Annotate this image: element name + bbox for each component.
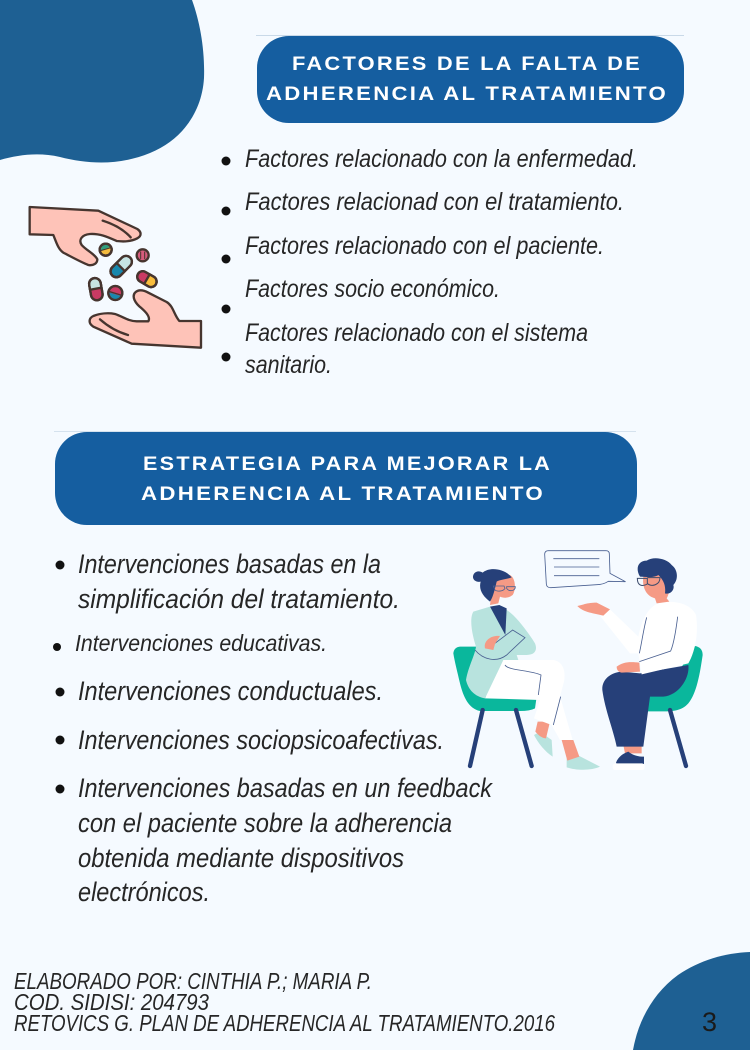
list: factores: Factores relacionado con el sistema bbox=[245, 319, 588, 347]
icon: pill round blue-red bbox=[108, 286, 122, 300]
page number: 3 bbox=[702, 1007, 717, 1037]
list: estrategia: con el paciente sobre la adherencia bbox=[78, 808, 452, 838]
list: factores: Factores socio económico. bbox=[245, 275, 500, 303]
list: estrategia: electrónicos. bbox=[78, 877, 210, 907]
footer: credits: ELABORADO POR: CINTHIA P.; MARIA P. bbox=[14, 968, 372, 994]
list: estrategia: Intervenciones sociopsicoafectivas. bbox=[78, 725, 444, 755]
footer: credits: COD. SIDISI: 204793 bbox=[14, 989, 209, 1015]
icon: lower hand bbox=[90, 290, 201, 348]
illustration: two people talking bbox=[453, 551, 703, 770]
icon: upper hand bbox=[30, 207, 141, 265]
icon: capsule blue bbox=[108, 253, 134, 280]
doctor bbox=[466, 569, 600, 770]
blob: bottom-right corner bbox=[633, 952, 750, 1050]
list: estrategia: Intervenciones educativas. bbox=[75, 630, 327, 656]
list: factores: Factores relacionado con el paciente. bbox=[245, 232, 604, 260]
list: estrategia: Intervenciones conductuales. bbox=[78, 676, 383, 706]
list: factores: Factores relacionad con el tratamiento. bbox=[245, 188, 624, 216]
speech bubble bbox=[545, 551, 625, 588]
heading: factores bbox=[256, 36, 684, 123]
icon: capsule yellow bbox=[135, 269, 159, 289]
patient chair bbox=[647, 646, 703, 766]
icon: pill round green bbox=[100, 244, 112, 256]
list: estrategia: obtenida mediante dispositivos bbox=[78, 843, 404, 873]
list: estrategia: simplificación del tratamiento. bbox=[78, 584, 400, 614]
blob: top-left corner bbox=[0, 0, 204, 163]
heading: estrategia bbox=[54, 432, 637, 525]
footer: credits bbox=[14, 968, 555, 1036]
list: estrategia bbox=[53, 549, 493, 907]
heading: estrategia: ESTRATEGIA PARA MEJORAR LA bbox=[143, 453, 552, 475]
icon: hands and pills bbox=[30, 207, 201, 348]
heading: factores: FACTORES DE LA FALTA DE bbox=[292, 53, 642, 75]
list: factores: sanitario. bbox=[245, 351, 332, 379]
list: factores: Factores relacionado con la enfermedad. bbox=[245, 145, 638, 173]
list: estrategia: Intervenciones basadas en un feedback bbox=[78, 773, 493, 803]
list: factores bbox=[222, 145, 638, 379]
heading: factores: ADHERENCIA AL TRATAMIENTO bbox=[266, 83, 668, 105]
doctor chair bbox=[453, 647, 537, 766]
patient bbox=[577, 558, 697, 770]
icon: capsule pink bbox=[88, 277, 104, 301]
list: estrategia: Intervenciones basadas en la bbox=[78, 549, 381, 579]
footer: credits: RETOVICS G. PLAN DE ADHERENCIA AL TRATAMIENTO.2016 bbox=[14, 1010, 555, 1036]
heading: estrategia: ADHERENCIA AL TRATAMIENTO bbox=[141, 483, 545, 505]
icon: pill round pink bbox=[137, 249, 149, 261]
